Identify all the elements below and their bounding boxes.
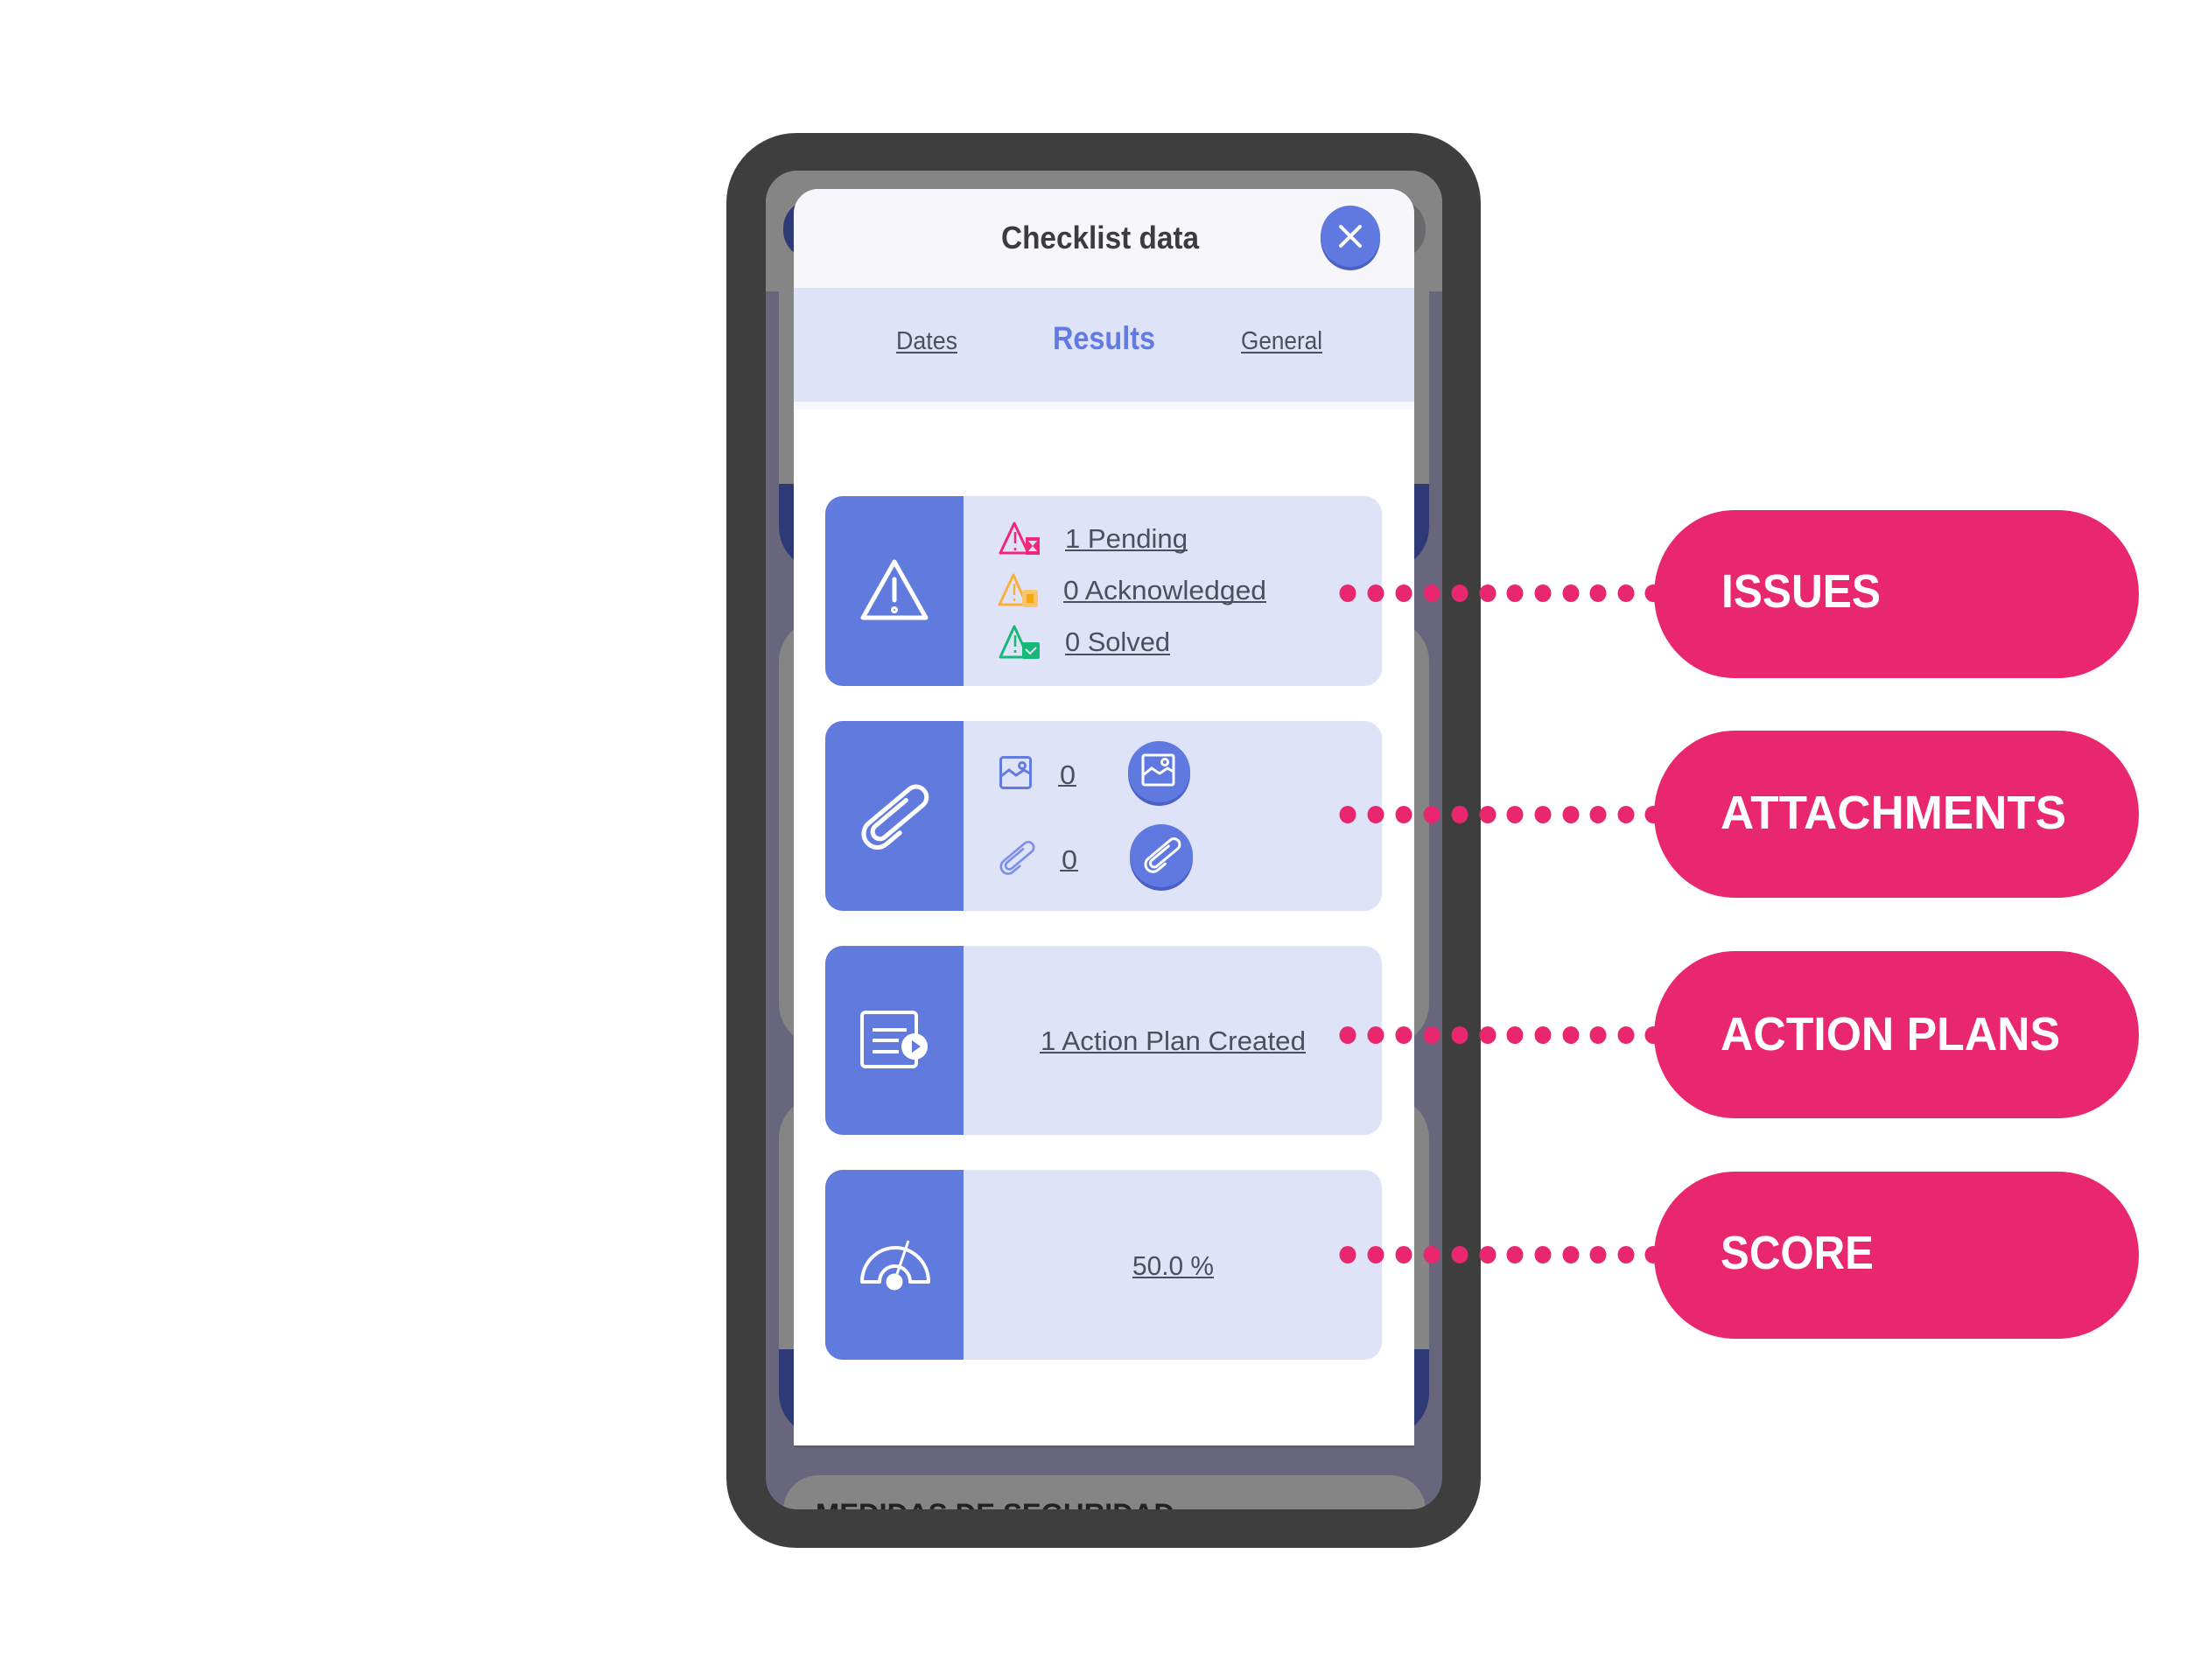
icon: acknowledged warning <box>999 575 1038 607</box>
callout: issues: ISSUES <box>1721 565 1881 618</box>
callout: attachments: ATTACHMENTS <box>1721 787 2066 839</box>
phone mockup <box>726 133 1481 1580</box>
tab bar: Dates <box>896 327 957 355</box>
dimmed background screen <box>766 171 1442 1580</box>
dotted connector: action plans <box>1339 1026 1661 1044</box>
text: image count: 0 <box>1060 760 1076 790</box>
callout: attachments <box>1654 731 2139 898</box>
tab bar <box>794 288 1414 410</box>
panel: score card <box>825 1170 1382 1360</box>
callout: score <box>1654 1172 2139 1339</box>
modal header: Checklist data <box>1001 220 1200 256</box>
icon: pending warning <box>1000 523 1040 555</box>
text: file count: 0 <box>1062 844 1077 875</box>
icon: image button <box>1128 741 1190 806</box>
icon: paperclip <box>859 782 935 853</box>
icon: gauge <box>862 1241 929 1290</box>
dotted connector: score <box>1339 1246 1661 1264</box>
dotted connector: issues <box>1339 584 1661 602</box>
phone frame <box>726 133 1481 1548</box>
icon: action plan document <box>862 1012 928 1067</box>
callout: action plans: ACTION PLANS <box>1721 1008 2060 1060</box>
icon: image outline <box>1001 758 1031 788</box>
dotted connector: attachments <box>1339 806 1661 823</box>
text: solved: 0 Solved <box>1065 626 1170 657</box>
dimmed background screen: MEDIDAS DE SEGURIDAD <box>816 1498 1174 1530</box>
panel: action plans card <box>825 946 1382 1135</box>
modal header <box>794 189 1414 288</box>
panel: attachments card <box>825 721 1382 911</box>
text: acknowledged: 0 Acknowledged <box>1063 575 1266 606</box>
callout: score: SCORE <box>1721 1227 1874 1279</box>
callout: issues <box>1654 510 2139 678</box>
tab bar: General <box>1241 327 1322 355</box>
close button <box>1321 206 1380 270</box>
icon: solved warning <box>1000 626 1040 659</box>
text: action plan created: 1 Action Plan Created <box>1041 1026 1306 1056</box>
icon: small paperclip <box>998 840 1038 877</box>
text: pending: 1 Pending <box>1065 523 1188 554</box>
icon: warning triangle <box>863 562 926 618</box>
panel: issues card <box>825 496 1382 686</box>
callout: action plans <box>1654 951 2139 1118</box>
text: score value: 50.0 % <box>1132 1250 1214 1281</box>
modal body <box>794 189 1414 1446</box>
icon: paperclip button <box>1130 824 1193 891</box>
panel: checklist data modal <box>794 189 1414 1446</box>
tab bar: Results <box>1053 320 1155 356</box>
